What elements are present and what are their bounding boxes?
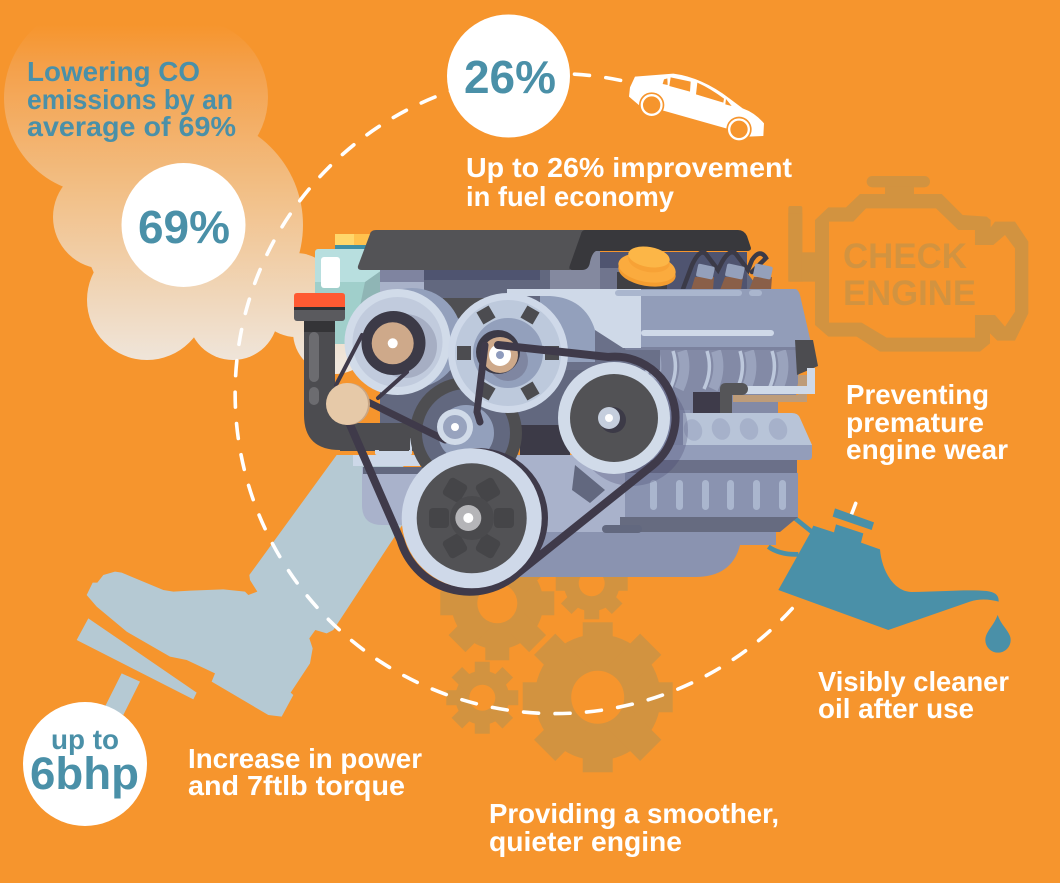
text: power and torque: and 7ftlb torque bbox=[188, 770, 405, 801]
text: fuel economy bbox=[466, 152, 792, 212]
text: smoother engine: quieter engine bbox=[489, 826, 682, 857]
icon: car bbox=[629, 74, 764, 142]
text: power and torque bbox=[188, 743, 422, 801]
right side pipe fittings bbox=[693, 340, 818, 414]
text: lowering CO emissions: average of 69% bbox=[27, 111, 236, 142]
icon: check engine light: ENGINE bbox=[843, 274, 976, 313]
stat badge: 69%: 69% bbox=[138, 201, 230, 253]
coolant bottle bbox=[315, 234, 385, 344]
engine bbox=[294, 230, 818, 592]
crankshaft pulley bbox=[402, 448, 548, 588]
oil filler cap bbox=[616, 244, 678, 291]
tan tensioner pulley bbox=[326, 383, 370, 425]
text: cleaner oil bbox=[818, 666, 1009, 724]
icon: check engine light bbox=[788, 176, 1028, 352]
text: cleaner oil: oil after use bbox=[818, 693, 974, 724]
text: lowering CO emissions: emissions by an bbox=[27, 84, 233, 115]
text: power and torque: Increase in power bbox=[188, 743, 422, 774]
icon: oil can bbox=[768, 508, 1011, 653]
stat badge: 69% bbox=[122, 163, 246, 287]
stat badge: up to 6bhp: up to bbox=[51, 724, 119, 755]
text: fuel economy: in fuel economy bbox=[466, 181, 674, 212]
stat badge: 26% bbox=[447, 14, 570, 138]
engine block base bbox=[380, 250, 760, 440]
coil wires bbox=[683, 252, 766, 289]
upper middle pulley bbox=[448, 293, 568, 413]
text: smoother engine: Providing a smoother, bbox=[489, 798, 779, 829]
text: lowering CO emissions bbox=[27, 56, 236, 142]
drive belts bbox=[336, 335, 675, 592]
text: lowering CO emissions: Lowering CO bbox=[27, 56, 200, 87]
exhaust cloud bbox=[4, 2, 377, 374]
intake fins bbox=[620, 349, 799, 465]
text: preventing engine wear: premature bbox=[846, 407, 984, 438]
cylinder head cover bbox=[507, 289, 812, 370]
icon: large gear bbox=[523, 622, 673, 772]
small idler pulley bbox=[437, 409, 473, 445]
intake cover bbox=[358, 230, 751, 270]
text: smoother engine bbox=[489, 798, 779, 857]
icon: upper small gear bbox=[556, 547, 628, 619]
text: preventing engine wear bbox=[846, 379, 1008, 465]
icon: medium gear bbox=[440, 546, 554, 660]
icon: leg and boot bbox=[87, 455, 403, 717]
stat badge: 26%: 26% bbox=[464, 51, 556, 103]
dashed circle path bbox=[235, 74, 856, 714]
text: fuel economy: Up to 26% improvement bbox=[466, 152, 792, 183]
icon: check engine light: CHECK bbox=[843, 237, 967, 276]
text: preventing engine wear: engine wear bbox=[846, 434, 1008, 465]
stat badge: up to 6bhp: 6bhp bbox=[30, 748, 139, 799]
stat badge: up to 6bhp bbox=[23, 702, 147, 826]
crank idler backing pulley bbox=[410, 377, 522, 489]
upper left pulley bbox=[344, 288, 462, 395]
right pulley bbox=[558, 362, 688, 486]
spark plugs bbox=[691, 263, 773, 290]
text: preventing engine wear: Preventing bbox=[846, 379, 989, 410]
coolant pipe with red cap bbox=[294, 293, 410, 450]
icon: accelerator pedal bbox=[77, 618, 197, 715]
lower engine block bbox=[340, 413, 812, 577]
icon: lower small gear bbox=[446, 662, 518, 734]
text: cleaner oil: Visibly cleaner bbox=[818, 666, 1009, 697]
